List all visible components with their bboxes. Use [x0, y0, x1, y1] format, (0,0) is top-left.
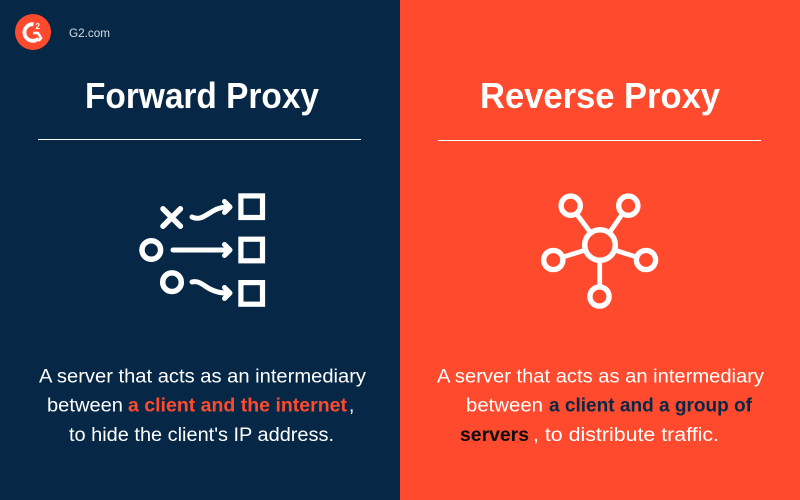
- icon part: client circles: [142, 241, 181, 292]
- text block: reverse proxy definition: [437, 366, 765, 446]
- text block: forward proxy definition: a client and the internet: [128, 396, 348, 416]
- text block: forward proxy definition: ,: [349, 396, 354, 416]
- icon part: arrows: [173, 202, 230, 298]
- text block: reverse proxy definition: servers: [460, 425, 529, 446]
- icon part: blocked client: [163, 209, 180, 226]
- heading: Reverse Proxy: Reverse Proxy: [480, 75, 720, 116]
- text block: reverse proxy definition: a client and a group of: [549, 396, 753, 416]
- icon part: destination squares: [241, 196, 262, 304]
- source label: G2.com: G2.com: [69, 28, 110, 40]
- heading: Forward Proxy: Forward Proxy: [85, 75, 319, 116]
- text block: reverse proxy definition: between: [466, 396, 543, 416]
- icon: hub and spokes: [544, 196, 656, 306]
- text block: forward proxy definition: between: [47, 396, 123, 416]
- text block: reverse proxy definition: , to distribute traffic.: [533, 425, 719, 446]
- icon: routed connections: [142, 196, 262, 304]
- logo: G2 badge: 2: [36, 22, 40, 31]
- text block: reverse proxy definition: A server that acts as an intermediary: [437, 366, 765, 388]
- panel: forward proxy: [0, 0, 400, 500]
- text block: forward proxy definition: A server that acts as an intermediary: [39, 366, 367, 388]
- text block: forward proxy definition: to hide the client's IP address.: [69, 425, 334, 446]
- panel: reverse proxy: [400, 0, 800, 500]
- logo: G2 badge: [15, 14, 51, 50]
- text block: forward proxy definition: [39, 366, 367, 446]
